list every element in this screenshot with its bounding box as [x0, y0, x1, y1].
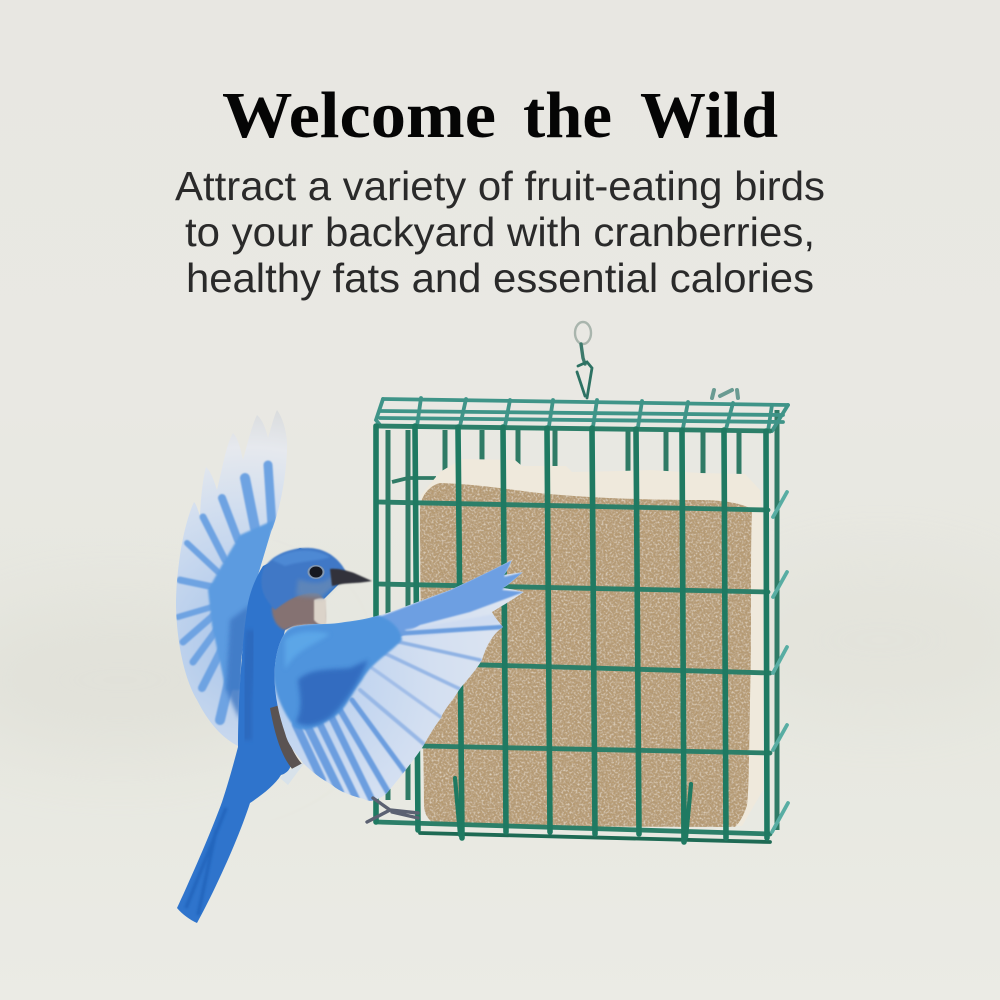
foreground wing — [274, 560, 524, 801]
tail shading — [186, 808, 226, 915]
body shading — [246, 630, 252, 740]
bottom back rail — [420, 833, 770, 842]
title — [222, 79, 778, 152]
beak — [330, 569, 372, 586]
suet block — [420, 459, 763, 827]
raised wing — [176, 410, 287, 746]
title: Wild — [640, 79, 778, 152]
tail and body — [177, 548, 340, 923]
icon: hanging hook — [575, 322, 592, 398]
suet feeder cage, back wires — [388, 410, 777, 830]
horizontal wires — [376, 426, 770, 834]
clips — [455, 778, 691, 838]
head — [261, 548, 346, 610]
subtitle: Attract a variety of fruit-eating birds — [175, 163, 825, 209]
block: pale top and side — [421, 459, 763, 826]
primaries — [372, 560, 524, 640]
suet feeder cage, front wires — [376, 390, 788, 842]
block: grainy seed cake — [420, 483, 752, 827]
flank — [270, 705, 302, 770]
subtitle: healthy fats and essential calories — [186, 255, 814, 301]
title: the — [523, 79, 612, 152]
vertical wires — [376, 426, 767, 842]
eye — [308, 565, 324, 579]
side ticks — [772, 492, 788, 832]
subtitle: to your backyard with cranberries, — [185, 209, 815, 255]
subtitle — [175, 163, 825, 301]
lid wires — [376, 390, 788, 431]
foot — [367, 798, 418, 822]
throat — [272, 590, 325, 630]
bird — [170, 405, 530, 923]
title: Welcome — [222, 79, 496, 152]
